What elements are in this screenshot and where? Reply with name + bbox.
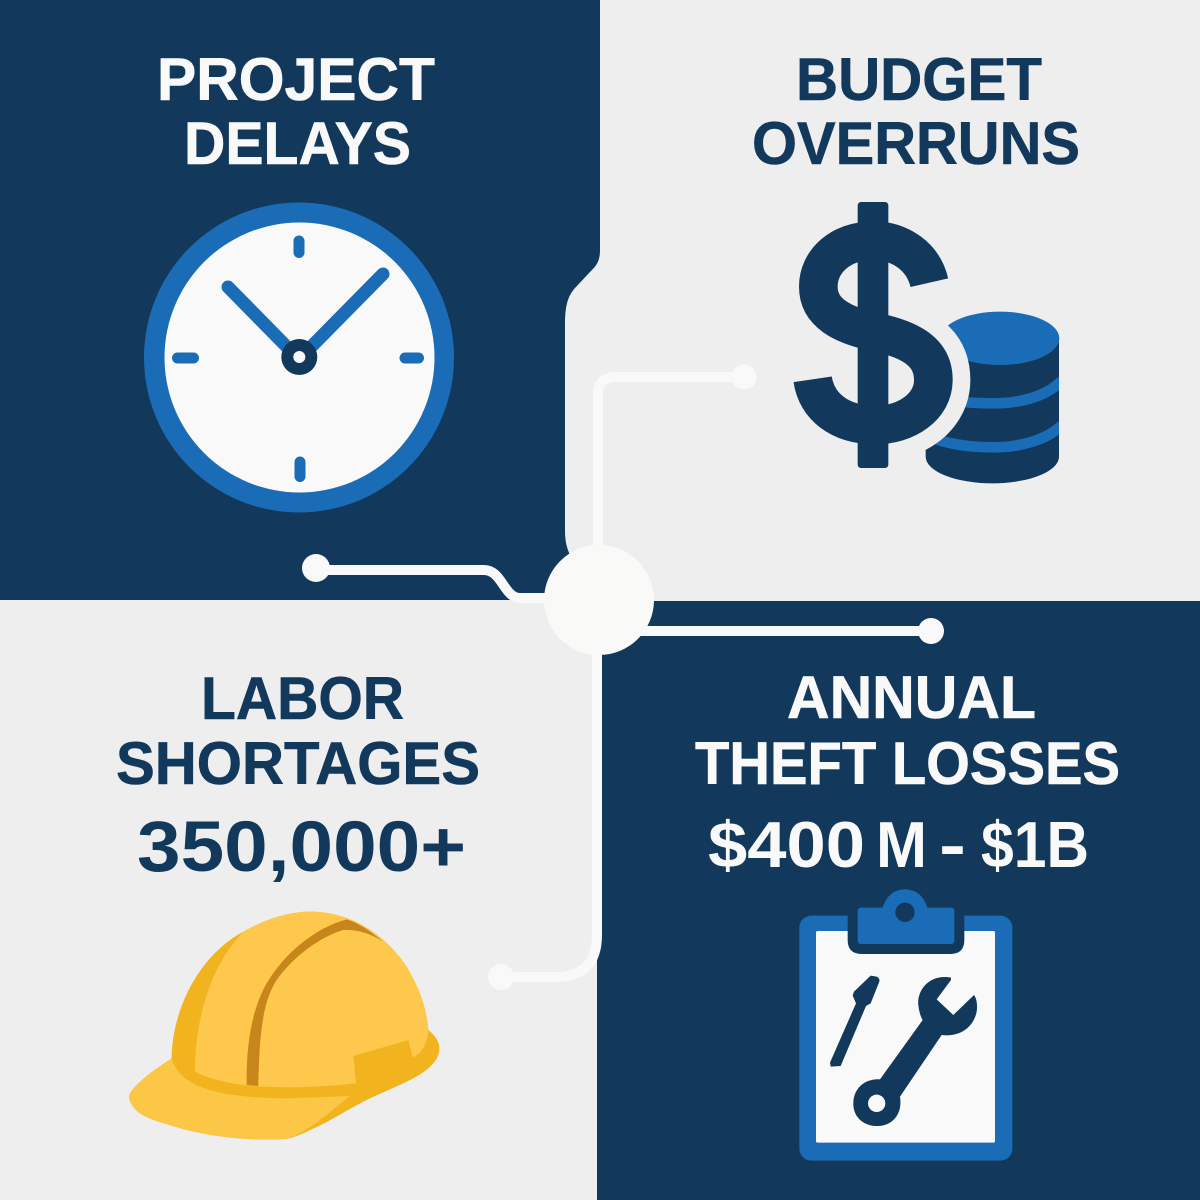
stat: $400M - $1B: $400 <box>708 808 865 881</box>
stat: $400M - $1B <box>708 808 1089 881</box>
stat: $400M - $1B: - <box>939 808 966 881</box>
central hub <box>544 545 654 655</box>
heading: annual theft losses: ANNUAL <box>787 664 1036 731</box>
stat: $400M - $1B: $1B <box>981 808 1089 881</box>
wrench <box>853 977 977 1126</box>
heading: budget overruns: BUDGET <box>796 46 1042 113</box>
heading: budget overruns: OVERRUNS <box>752 110 1080 177</box>
icon: dollar and coins <box>813 202 1062 483</box>
heading: labor shortages: SHORTAGES <box>116 730 480 797</box>
dollar sign <box>813 202 933 468</box>
heading: project delays: DELAYS <box>184 110 411 177</box>
heading: labor shortages <box>116 665 480 797</box>
coin stack <box>926 312 1062 483</box>
panel: labor shortages background <box>0 600 600 1200</box>
connector: budget overruns <box>598 364 756 560</box>
icon: clock <box>144 202 454 512</box>
connector: annual theft losses <box>630 618 944 644</box>
icon: hard hat <box>129 912 439 1139</box>
icon: clipboard with tools <box>799 889 1012 1161</box>
panel: project delays background <box>0 0 600 600</box>
stat: $400M - $1B: M <box>876 808 927 881</box>
stat: 350,000+: 350,000+ <box>137 808 466 887</box>
screwdriver <box>830 976 879 1067</box>
heading: annual theft losses: THEFT LOSSES <box>695 730 1120 797</box>
panel: annual theft losses background <box>597 601 1200 1200</box>
heading: annual theft losses <box>695 664 1120 797</box>
heading: project delays <box>157 46 435 177</box>
connector: labor shortages <box>488 640 597 990</box>
heading: project delays: PROJECT <box>157 46 435 113</box>
panel: budget overruns background <box>560 0 1200 602</box>
heading: budget overruns <box>752 46 1080 177</box>
heading: labor shortages: LABOR <box>201 665 404 732</box>
connector: project delays <box>302 554 560 598</box>
